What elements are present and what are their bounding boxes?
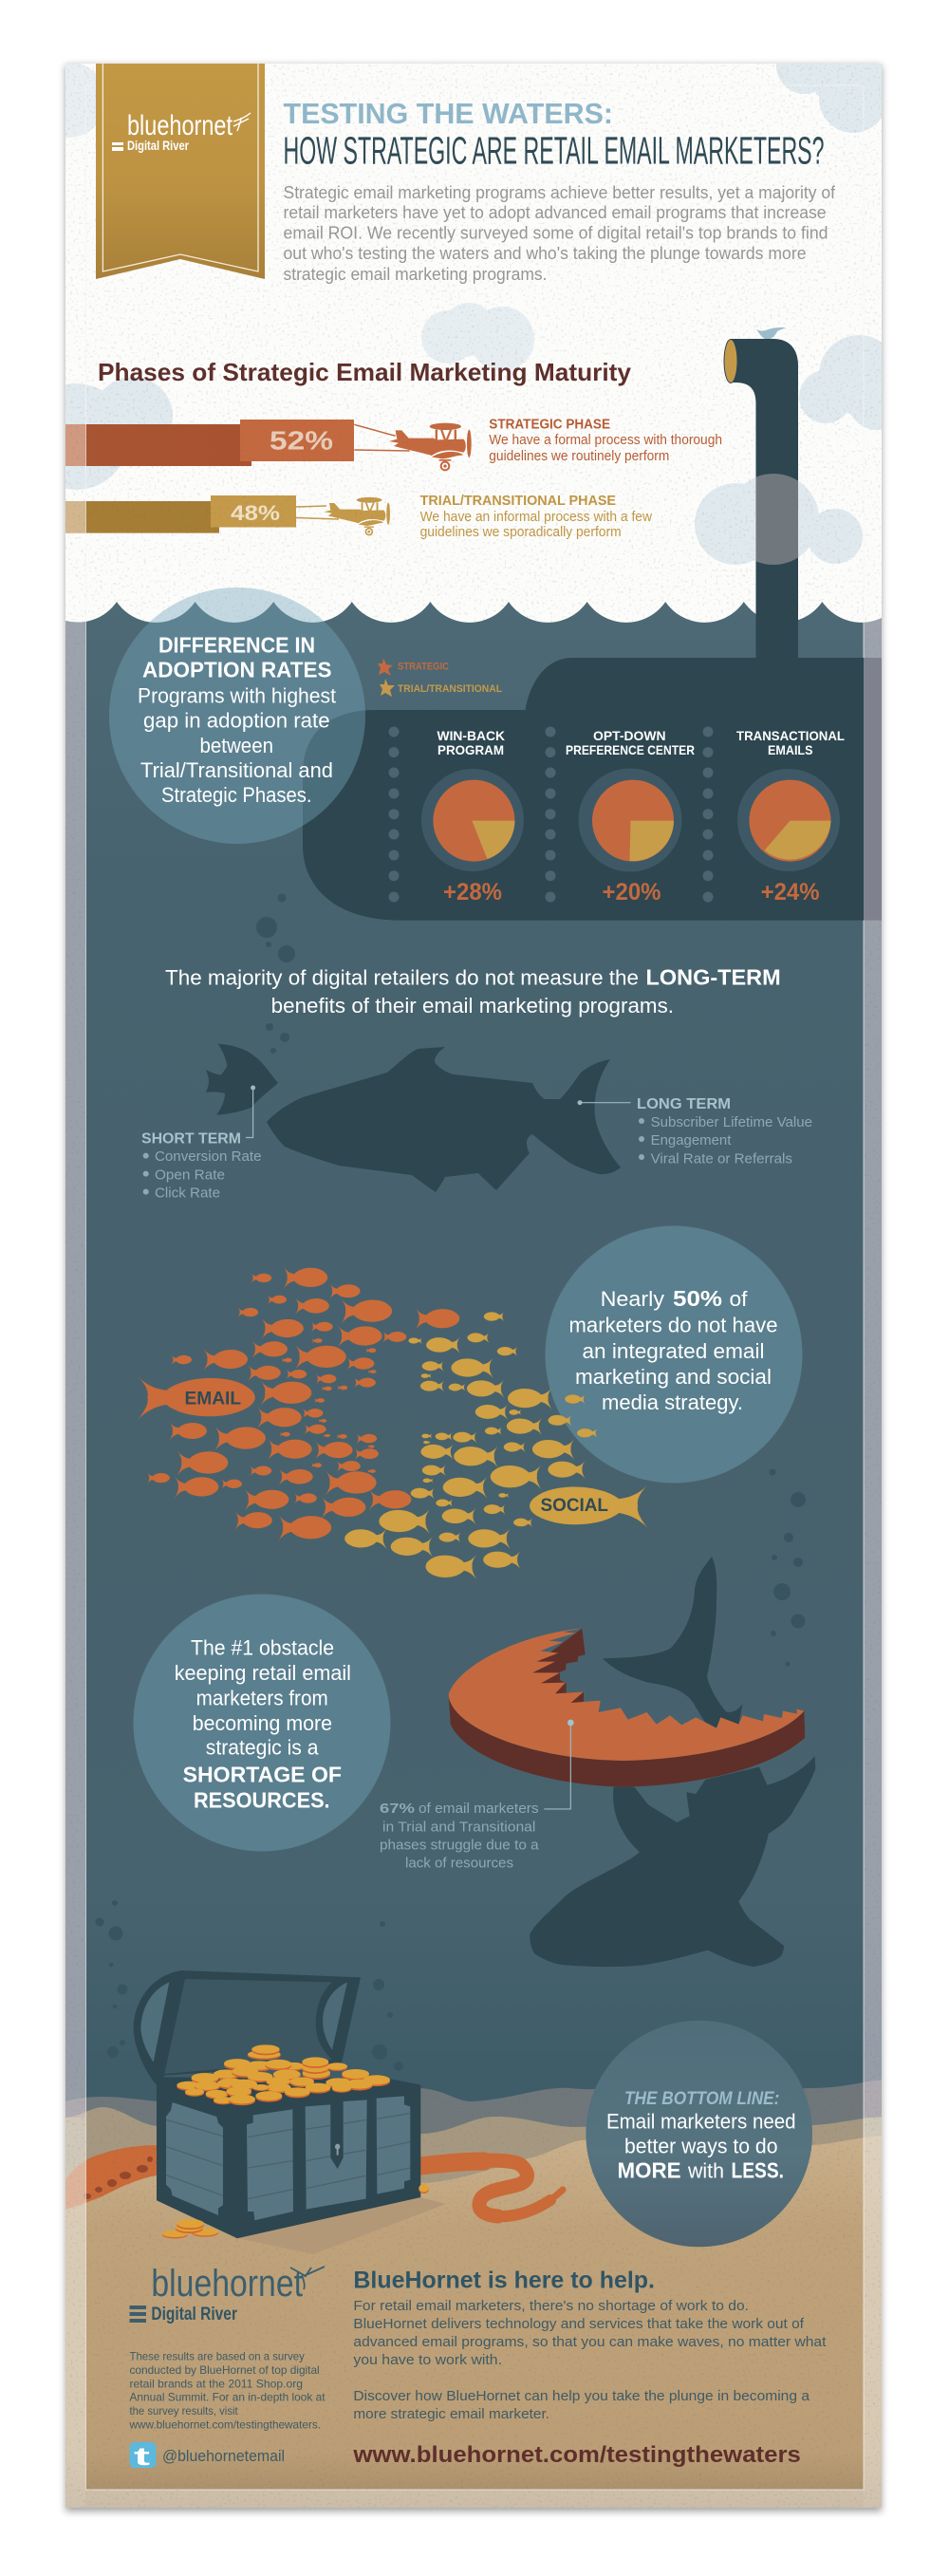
text: 67% of email marketers: in Trial and Transitional [382,1819,535,1836]
pie chart: win-back program +28% [421,728,524,905]
text: survey note [129,2349,326,2431]
text: bluehornet paragraph: For retail email marketers, there's no shortage of work to do. [353,2298,749,2314]
text: 67% of email marketers: 67% [380,1801,415,1817]
ribbon with logo [96,64,265,279]
pie chart: transactional emails +24% [736,728,845,905]
text: strategic phase description: guidelines we routinely perform [489,448,669,464]
callout bubble: difference in adoption rates: gap in adoption rate [143,709,330,733]
callout bubble: #1 obstacle: strategic is a [206,1736,319,1760]
clouds in the sky [65,64,882,565]
icon: small fish short term [206,1044,278,1115]
illustration: shark biting resources pie [449,1557,815,1967]
long term list: Viral Rate or Referrals [651,1150,792,1167]
text: bluehornet paragraph: Discover how BlueHornet can help you take the plunge in becoming a [353,2388,810,2404]
bar: trial/transitional phase 48%: 48% [231,501,280,525]
inner frame [85,85,864,2490]
fish school: email [138,1267,459,1540]
submarine portholes dots [389,727,714,902]
icon: biplane strategic [354,423,472,470]
intro text: out who's testing the waters and who's taking the plunge towards more [283,244,807,263]
icon: bird [756,327,786,339]
callout bubble: difference in adoption rates [109,588,365,844]
text: survey note: www.bluehornet.com/testingthewaters. [129,2417,321,2431]
callout bubble: #1 obstacle: SHORTAGE OF [183,1763,342,1787]
text: 67% of email marketers [380,1801,539,1871]
callout bubble: the bottom line: THE BOTTOM LINE: [624,2089,779,2109]
text: survey note: retail brands at the 2011 Shop.org [129,2377,303,2390]
fish school: social [344,1312,647,1579]
short term list: Conversion Rate [155,1148,262,1165]
bubbles near chest [95,1900,403,2071]
pie top face [449,1629,804,1761]
water background [65,588,882,2145]
title: TESTING THE WATERS: [283,97,613,130]
text: bluehornet paragraph: advanced email programs, so that you can make waves, no matter what [353,2334,827,2350]
logo: bluehornet digital river: Digital River [151,2305,237,2324]
pie far wall [522,1629,586,1706]
text: bluehornet paragraph: you have to work with. [353,2352,502,2368]
heading: phases of strategic email marketing maturity: Phases of Strategic Email Marketing Maturity [98,358,632,386]
intro text: Strategic email marketing programs achieve better results, yet a majority of [283,183,836,202]
periscope [723,339,798,658]
icon: biplane trial [296,497,390,535]
text: strategic phase description: STRATEGIC PHASE [489,417,610,432]
legend: STRATEGIC [398,661,449,672]
seabed bands [65,2080,882,2508]
callout bubble: nearly 50% [545,1226,803,1483]
icon: big fish long term [267,1047,621,1192]
pie chart: win-back program +28%: PROGRAM [437,742,504,757]
text: 67% of email marketers: phases struggle due to a [380,1838,539,1854]
callout bubble: difference in adoption rates: DIFFERENCE IN [158,633,315,658]
text: twitter handle: @bluehornetemail [162,2447,285,2465]
legend: TRIAL/TRANSITIONAL [398,683,502,695]
text: trial phase description: We have an informal process with a few [420,509,652,525]
callout bubble: #1 obstacle: The #1 obstacle [191,1635,334,1659]
intro text: retail marketers have yet to adopt advanced email programs that increase [283,203,826,222]
callout bubble: difference in adoption rates: Programs with highest [138,684,336,708]
text: trial phase description: TRIAL/TRANSITIONAL PHASE [420,494,616,509]
text: survey note: These results are based on a survey [129,2349,305,2362]
short term list: SHORT TERM [141,1131,241,1148]
chest body [157,2077,420,2238]
callout bubble: nearly 50%: marketing and social [575,1365,772,1389]
logo: bluehornet digital river [129,2263,325,2324]
icon: tentacle right [420,2160,563,2216]
short term list: Click Rate [155,1185,220,1201]
bubbles near shark [769,1469,806,1667]
long term list [577,1096,812,1167]
pie chart: opt-down preference center +20%: OPT-DOWN [593,728,666,743]
text: bluehornet paragraph: more strategic email marketer. [353,2406,549,2422]
text: 67% of email marketers: of email marketers [419,1801,539,1817]
text: strategic phase description: We have a formal process with thorough [489,432,722,448]
shark body [530,1756,815,1967]
submarine hull [303,658,882,921]
chest lid [134,1970,361,2085]
text: trial phase description: guidelines we sporadically perform [420,524,622,540]
callout bubble: the bottom line: better ways to do [624,2135,778,2158]
short term list: Open Rate [155,1167,225,1183]
callout bubble: nearly 50%: of [729,1287,748,1311]
callout bubble: the bottom line: MORE [617,2158,681,2183]
bubbles near long-term text [256,894,295,1054]
spilled coins [162,2184,429,2238]
text: 67% of email marketers: lack of resources [405,1855,513,1871]
intro text: strategic email marketing programs. [283,265,547,284]
callout bubble: the bottom line: LESS. [731,2158,784,2183]
bar: trial/transitional phase 48% [65,495,296,533]
pie chart: win-back program +28%: WIN-BACK [437,728,505,743]
heading: bluehornet is here to help: BlueHornet is here to help. [353,2268,655,2294]
fish labels [184,1390,608,1516]
bar: strategic phase 52% [65,420,354,466]
pie chart: opt-down preference center +20% [566,728,695,905]
callout bubble: nearly 50%: Nearly [601,1287,664,1311]
ribbon with logo: Digital River [127,138,189,153]
text: trial phase description [420,494,652,540]
callout bubble: #1 obstacle: RESOURCES. [194,1788,330,1813]
fish labels: EMAIL [184,1390,241,1409]
callout bubble: #1 obstacle: keeping retail email [175,1661,351,1685]
callout bubble: nearly 50%: 50% [673,1286,722,1311]
icon: twitter [129,2442,156,2471]
legend [378,658,502,697]
long term list: Engagement [651,1132,732,1148]
short term list [141,1086,262,1201]
callout bubble: nearly 50%: media strategy. [602,1391,743,1414]
pie chart: transactional emails +24%: EMAILS [768,742,812,757]
text: long-term benefits statement [165,965,781,1017]
text: long-term benefits statement: The majority of digital retailers do not measure the [165,966,639,990]
callout bubble: the bottom line: Email marketers need [606,2110,796,2134]
icon: tentacle left [65,2145,161,2210]
text: survey note: conducted by BlueHornet of top digital [129,2363,320,2377]
bar: strategic phase 52%: 52% [270,425,333,456]
callout bubble: difference in adoption rates: Strategic Phases. [161,783,311,807]
text: strategic phase description [489,417,722,464]
text: survey note: the survey results, visit [129,2404,238,2417]
text: long-term benefits statement: LONG-TERM [645,965,781,990]
intro text: email ROI. We recently surveyed some of digital retail's top brands to find [283,224,828,243]
long term list: LONG TERM [637,1096,731,1112]
text: bluehornet paragraph: BlueHornet delivers technology and services that take the work out of [353,2316,805,2332]
text: survey note: Annual Summit. For an in-depth look at [129,2391,326,2404]
callout bubble: #1 obstacle: becoming more [193,1711,332,1735]
callout bubble: #1 obstacle: marketers from [196,1686,328,1709]
shark tail [603,1557,743,1728]
chest shadow [237,2197,446,2254]
margin tint [65,588,882,2508]
pie chart: transactional emails +24%: +24% [761,879,820,905]
callout bubble: #1 obstacle [133,1595,391,1851]
callout leader [544,1723,570,1809]
callout bubble: difference in adoption rates: ADOPTION RATES [142,658,332,682]
pie chart: opt-down preference center +20%: PREFERENCE CENTER [566,742,695,757]
callout bubble: the bottom line: with [687,2159,724,2183]
callout bubble: the bottom line [586,2021,812,2247]
logo: bluehornet digital river: bluehornet [151,2263,303,2305]
coins [177,2044,390,2105]
title [283,103,824,164]
text: long-term benefits statement: benefits of their email marketing programs. [271,994,674,1017]
icon: twitter: t [134,2442,150,2471]
callout bubble: nearly 50%: an integrated email [583,1339,765,1363]
callout bubble: difference in adoption rates: between [199,734,273,757]
icon: treasure chest [134,1970,429,2238]
callout bubble: nearly 50%: marketers do not have [569,1314,778,1337]
pie wall [449,1694,805,1787]
text: bluehornet paragraph [353,2298,827,2422]
pie chart: opt-down preference center +20%: +20% [602,879,661,905]
ribbon with logo: bluehornet [127,110,233,141]
long term list: Subscriber Lifetime Value [651,1114,812,1130]
fish labels: SOCIAL [541,1496,608,1516]
callout bubble: difference in adoption rates: Trial/Transitional and [140,758,333,782]
pie chart: win-back program +28%: +28% [443,879,502,905]
url: www.bluehornet.com/testingthewaters [352,2442,801,2468]
intro text [283,183,836,284]
pie chart: transactional emails +24%: TRANSACTIONAL [736,728,845,743]
